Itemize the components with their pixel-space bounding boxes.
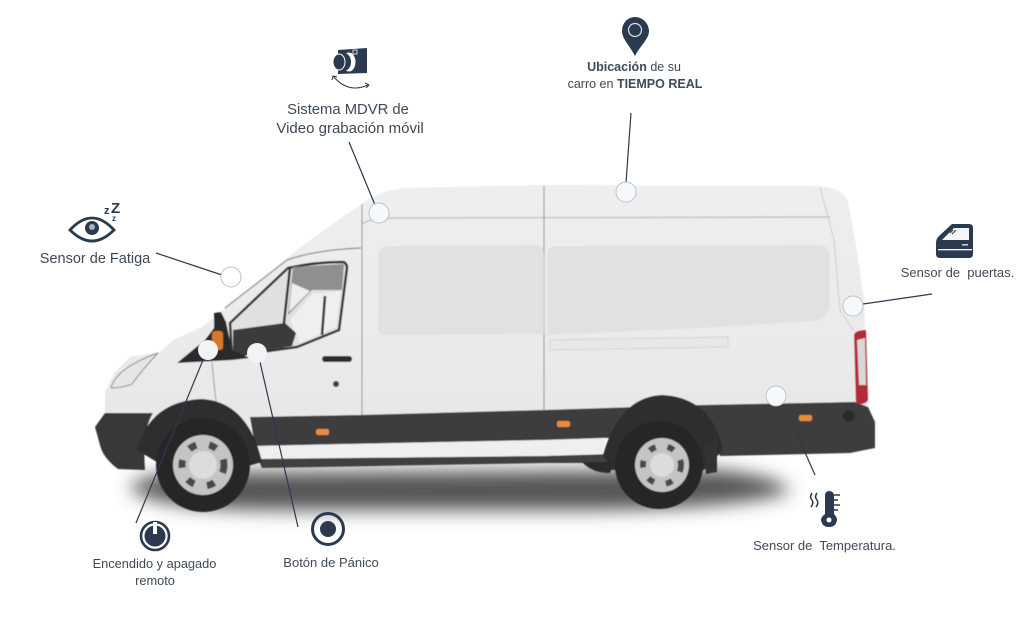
text: Botón de Pánico: Botón de Pánico [283,555,379,570]
mirror [177,312,250,363]
rear door seam [820,187,853,330]
door seams [362,186,544,460]
front wheel [156,418,250,512]
marker: puertas [843,296,863,316]
marker: Botón de Pánico [247,343,267,363]
text: remoto: remoto [135,573,175,588]
lower body band [250,402,875,456]
icon: sleepy eye: z [112,214,116,223]
icon: door [936,224,973,258]
white sill [258,438,606,459]
rear axle [582,462,614,473]
icon: sleepy eye: Z [111,200,120,217]
marker: Ubicación [616,182,636,202]
ground shadow [130,470,790,510]
marker: Encendido [198,340,218,360]
marker: Temperatura [766,386,786,406]
icon: sleepy eye [70,200,120,241]
van body [105,185,868,462]
side panels [378,245,544,335]
rear wheel arch [603,395,723,470]
text: Encendido: Encendido y apagado [93,556,216,571]
front bumper [95,413,153,470]
side rub strip [550,337,728,350]
marker: Sensor de Fatiga [221,267,241,287]
text: Ubicación: Ubicación de su [587,60,681,74]
window [230,262,347,356]
icon: sleepy eye: z [104,205,110,217]
van illustration [95,185,875,512]
icon: thermometer [810,491,840,527]
text: Sensor de Fatiga: Sensor de Fatiga [40,251,151,267]
markers [316,429,329,435]
mud flap [704,440,717,474]
front wheel arch [137,399,262,470]
icon: power [141,522,169,550]
icon: panic button [312,514,344,544]
tail light [854,330,868,404]
text: Sistema MDVR: Sistema MDVR de [287,102,409,118]
text: Sensor de puertas: Sensor de puertas. [901,265,1014,280]
fender seam [212,362,217,410]
text: Video grabación: Video grabación móvil [276,120,424,137]
front door outline [225,248,361,308]
door handle [322,356,352,362]
icon: camera [332,48,369,88]
text: carro en TIEMPO REAL: carro en TIEMPO REAL [568,77,703,91]
rear wheel [615,421,703,509]
roof crease [362,217,830,224]
icon: location pin [622,17,649,56]
marker: MDVR [369,203,389,223]
lower strip [258,454,613,468]
headlight [111,353,158,388]
connector lines [136,113,932,527]
text: Sensor de Temperatura: Sensor de Temperatura. [753,538,896,553]
